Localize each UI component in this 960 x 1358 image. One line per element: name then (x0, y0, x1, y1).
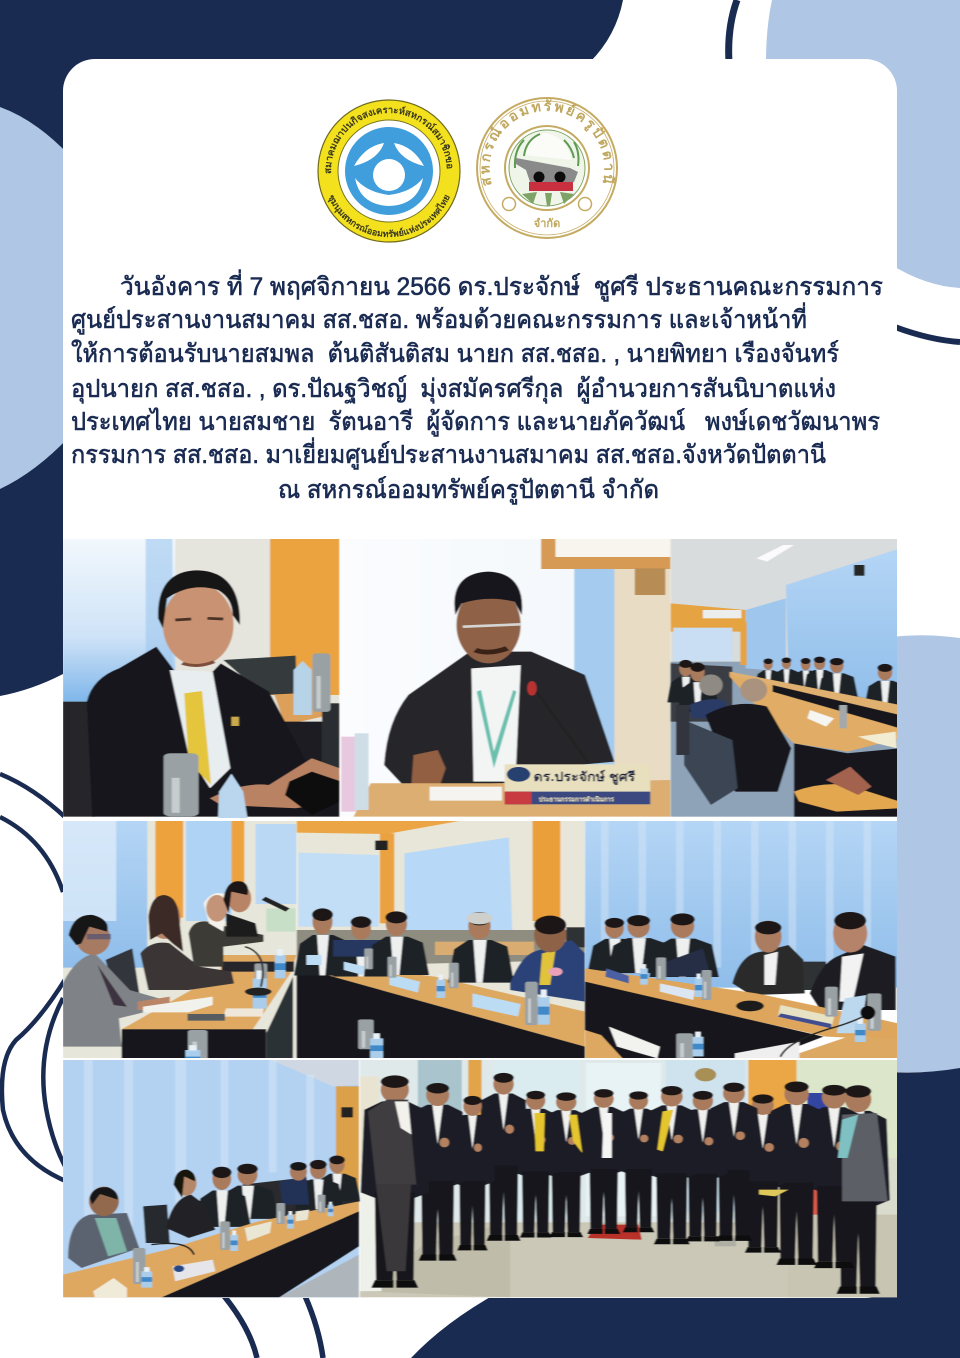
logo text: สหกรณ์ออมทรัพย์ครูปัตตานี (481, 99, 615, 186)
text block: announcement: อุปนายก สส.ชสอ. , ดร.ปัณฐวิชญ์ มุ่งสมัครศรีกุล ผู้อำนวยการสันนิบาตแห่ง (71, 375, 836, 404)
photo: Dr. Prachak at microphone: ประธานกรรมการดำเนินการ (539, 795, 615, 803)
photo row 3 (63, 1059, 898, 1297)
photo: wide view of meeting room (667, 538, 908, 817)
shape: light blue right panel (890, 635, 960, 1072)
photo: men along table (294, 821, 585, 1058)
text block: announcement: กรรมการ สส.ชสอ. มาเยี่ยมศูนย์ประสานงานสมาคม สส.ชสอ.จังหวัดปัตตานี (71, 437, 826, 470)
logo: savings cooperative federation seal: ชุมนุมสหกรณ์ออมทรัพย์แห่งประเทศไทย (328, 194, 450, 238)
text block: announcement: ณ สหกรณ์ออมทรัพย์ครูปัตตานี จำกัด (278, 476, 659, 505)
shape: light blue top-right blob (766, 0, 960, 288)
photo: delegates along long table (63, 1059, 361, 1297)
text block: announcement: วันอังคาร ที่ 7 พฤศจิกายน 2566 ดร.ประจักษ์ ชูศรี ประธานคณะกรรมการ (120, 269, 883, 302)
photo: Dr. Prachak at microphone (340, 538, 671, 817)
shape: navy right arc (895, 327, 960, 342)
photo: Dr. Prachak at microphone: ดร.ประจักษ์ ชูศรี (534, 769, 636, 785)
white content card (63, 59, 897, 1298)
photo: men seated before blue curtains (585, 821, 900, 1059)
logo: savings cooperative federation seal (317, 99, 461, 243)
shape: navy top arc (729, 0, 737, 62)
text block: announcement (71, 269, 883, 505)
shape: light blue left circle (0, 107, 70, 489)
logo: Pattani teachers savings cooperative seal (476, 97, 618, 239)
shape: left curves (0, 774, 68, 1182)
shape: bottom arcs (224, 1296, 323, 1358)
shape: navy bottom-right blob (411, 1068, 960, 1358)
photo: group portrait with thumbs up (360, 1059, 898, 1297)
photo row 1 (63, 538, 908, 818)
text block: announcement: ศูนย์ประสานงานสมาคม สส.ชสอ. พร้อมด้วยคณะกรรมการ และเจ้าหน้าที่ (71, 302, 807, 335)
text block: announcement: ประเทศไทย นายสมชาย รัตนอารี ผู้จัดการ และนายภัควัฒน์ พงษ์เดชวัฒนาพร (71, 407, 880, 437)
photo row 2 (63, 821, 900, 1069)
logo: Pattani teachers savings cooperative seal: จำกัด (534, 217, 560, 230)
text block: announcement: ให้การต้อนรับนายสมพล ต้นติสันติสม นายก สส.ชสอ. , นายพิทยา เรืองจันทร์ (71, 339, 839, 368)
shape: navy top-left blob (0, 0, 623, 696)
photo: senior man with yellow tie (63, 538, 340, 818)
photo: women seated at table (63, 821, 297, 1069)
